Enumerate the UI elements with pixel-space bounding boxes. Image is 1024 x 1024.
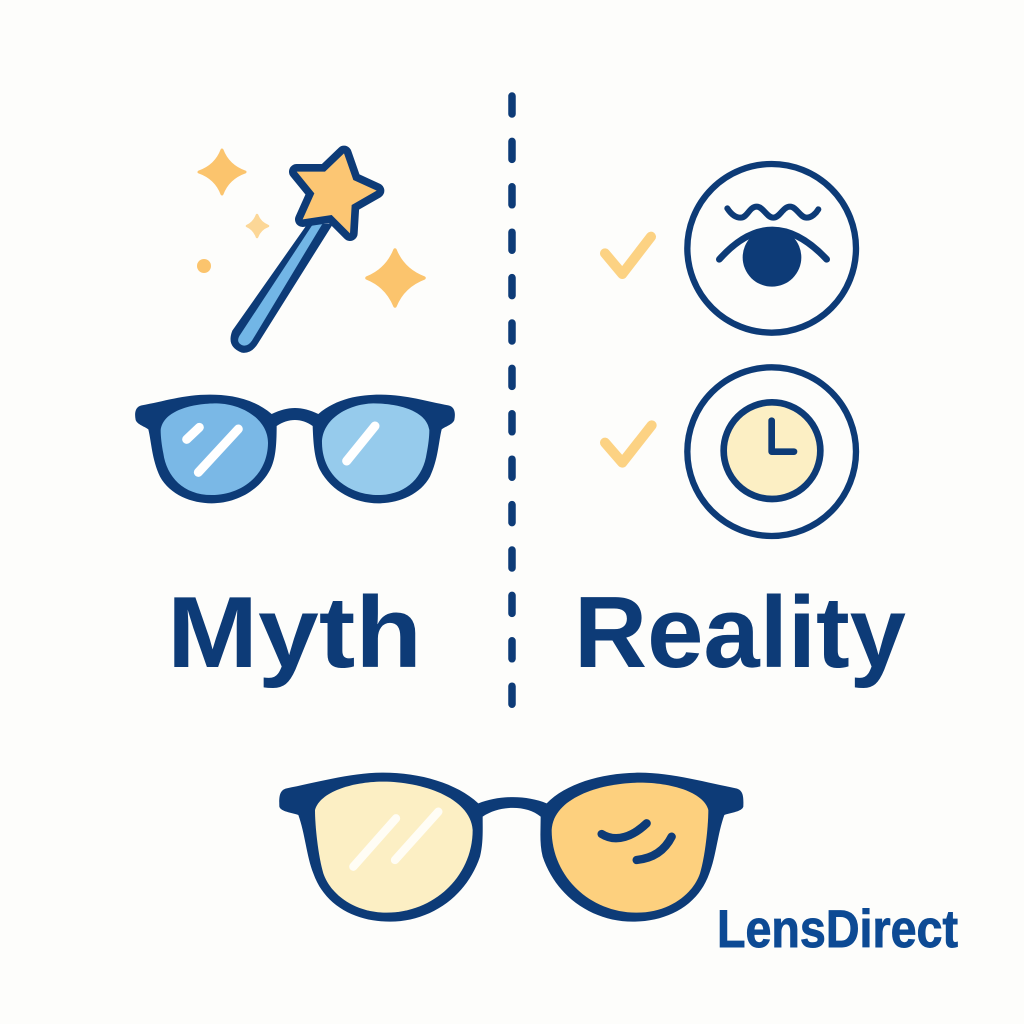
- lens highlights: [353, 812, 438, 867]
- left lens: [161, 403, 268, 495]
- icon: yellow glasses: [279, 773, 743, 922]
- logo: LensDirect: LensDirect: [717, 900, 958, 959]
- wand stick: [231, 223, 333, 353]
- icon: blue glasses: [135, 395, 455, 503]
- dashed divider: [508, 96, 516, 705]
- lens marks: [602, 823, 672, 860]
- lens highlights: [187, 426, 375, 472]
- icon: eye circle: [687, 164, 856, 333]
- left lens: [315, 782, 473, 913]
- wand star: [297, 153, 377, 233]
- icon: check two: [605, 425, 652, 463]
- icon: sparkles: [197, 150, 424, 306]
- frame: [279, 773, 743, 922]
- right lens: [322, 403, 429, 495]
- icon: check one: [605, 237, 651, 274]
- right lens: [552, 783, 708, 913]
- heading: Reality: Reality: [574, 577, 906, 689]
- icon: clock circle: [687, 367, 856, 536]
- frame: [135, 395, 455, 503]
- icon: magic wand with star: [231, 153, 377, 353]
- heading: Myth: Myth: [167, 577, 422, 689]
